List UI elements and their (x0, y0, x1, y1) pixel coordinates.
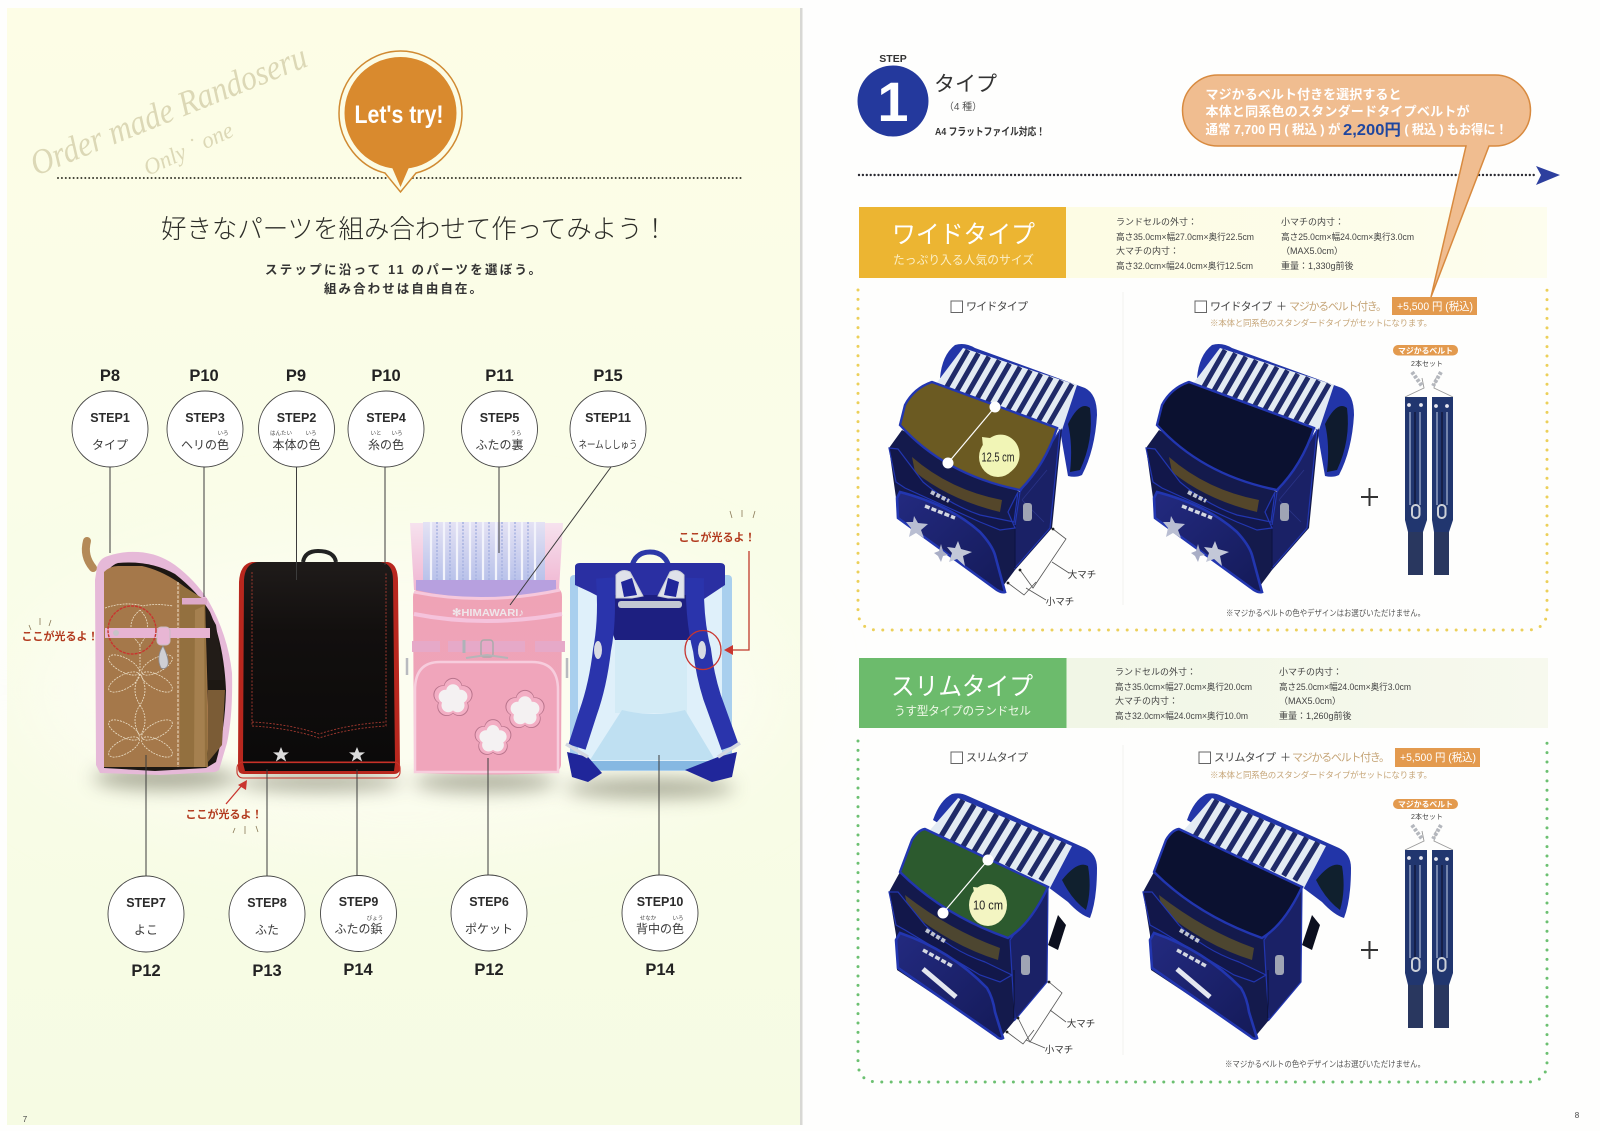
step circle: STEP4: いと (370, 430, 382, 437)
step circle: STEP1: P8 (100, 367, 120, 385)
band: slim type: 高さ25.0cm×幅24.0cm×奥行3.0cm (1279, 681, 1411, 692)
option label: wide with belt: ＋ (1276, 301, 1287, 313)
script lettering: Order made Randoseru (24, 37, 313, 183)
belts: slim (1393, 799, 1458, 1028)
step circle: STEP3: P10 (189, 367, 219, 385)
page number 7: 7 (23, 1115, 28, 1124)
step circle: STEP4: STEP4 (366, 411, 406, 425)
step circle: STEP10: STEP10 (637, 895, 683, 909)
panel: slim options dotted frame (858, 741, 1547, 1082)
Let's try speech bubble: Let's try! (354, 101, 444, 129)
step circle: STEP1: タイプ (92, 438, 128, 452)
Let's try speech bubble (339, 51, 462, 192)
band: slim type: （MAX5.0cm） (1279, 696, 1341, 706)
option label: slim with belt: スリムタイプ (1214, 751, 1276, 764)
band: slim type: 高さ32.0cm×幅24.0cm×奥行10.0m (1115, 710, 1248, 721)
band: slim type: 高さ35.0cm×幅27.0cm×奥行20.0cm (1115, 681, 1252, 692)
step circle: STEP7: よこ (134, 923, 158, 937)
bag: front view black with red edge (237, 551, 400, 778)
callout: belt discount: ( 税込 ) もお得に！ (1404, 122, 1508, 137)
step circle: STEP10: いろ (672, 915, 684, 922)
page number 8: 8 (1575, 1111, 1580, 1120)
bag: side view brown and pink (86, 541, 232, 775)
band: wide type: 高さ35.0cm×幅27.0cm×奥行22.5cm (1116, 231, 1254, 242)
option label: slim with belt: +5,500 円 (税込) (1400, 750, 1476, 764)
option label: slim: スリムタイプ (966, 751, 1028, 764)
callout: belt discount: マジかるベルト付きを選択すると (1206, 87, 1402, 102)
bag: back view blue (566, 552, 740, 782)
band: wide type: 大マチの内寸： (1116, 245, 1179, 256)
step circle: STEP7 (108, 876, 184, 980)
option label: slim with belt: ＋ (1280, 752, 1291, 764)
band: wide type: たっぷり入る人気のサイズ (893, 253, 1034, 267)
callout: belt discount: 本体と同系色のスタンダードタイプベルトが (1206, 104, 1470, 119)
option label: wide with belt (1195, 297, 1477, 328)
bag: wide with brown panel (889, 344, 1097, 592)
step circle: STEP9: STEP9 (339, 895, 378, 909)
bag: slim open (1143, 793, 1351, 1039)
panel: left page (7, 8, 800, 1125)
callout: belt discount: 2,200円 (1343, 122, 1401, 139)
step circle: STEP11 (570, 367, 646, 467)
step circle: STEP2: P9 (286, 367, 306, 385)
step circle: STEP6: STEP6 (469, 895, 509, 909)
bag: pink with flower pocket: ✻HIMAWARI♪ (452, 607, 524, 619)
step circle: STEP3: ヘリの色 (181, 438, 229, 452)
belts: slim: マジかるベルト (1398, 800, 1453, 809)
bag shadows (93, 766, 735, 798)
step circle: STEP8: STEP8 (247, 896, 287, 910)
note: wide: ※マジかるベルトの色やデザインはお選びいただけません。 (1226, 608, 1425, 618)
step circle: STEP9: ふたの鋲 (334, 921, 383, 936)
callout: glow left: ここが光るよ！ (22, 629, 98, 643)
band: slim type: うす型タイプのランドセル (894, 704, 1031, 718)
bag: wide with brown panel: 12.5 cm (982, 450, 1014, 464)
step circle: STEP7: STEP7 (126, 896, 166, 910)
step circle: STEP4 (348, 367, 424, 467)
step heading: タイプ (934, 73, 997, 96)
option label: wide: ワイドタイプ (966, 300, 1028, 313)
step circle: STEP9: びょう (367, 914, 383, 922)
step circle: STEP6 (451, 875, 527, 979)
depth labels: slim: 小マチ (1045, 1045, 1073, 1056)
band: wide type: 小マチの内寸： (1281, 216, 1344, 227)
band: slim type: 大マチの内寸： (1115, 695, 1178, 706)
step heading: A4 フラットファイル対応！ (935, 125, 1045, 138)
belts: wide (1393, 345, 1458, 575)
step circle: STEP11: STEP11 (585, 411, 631, 425)
step circle: STEP11: ネームししゅう (578, 439, 638, 451)
callout: glow right (678, 510, 756, 655)
step circle: STEP11: P15 (593, 367, 623, 385)
band: slim type: 小マチの内寸： (1279, 666, 1342, 677)
option label: wide with belt: ※本体と同系色のスタンダードタイプがセットになります。 (1210, 318, 1432, 328)
option label: wide with belt: マジかるベルト付き。 (1289, 300, 1387, 313)
step circle: STEP5: P11 (485, 367, 514, 385)
callout: belt discount (1182, 75, 1530, 297)
step circle: STEP4: いろ (391, 430, 403, 437)
belts: wide: 2本セット (1411, 359, 1443, 368)
band: wide type: （MAX5.0cm） (1281, 246, 1343, 256)
panel: wide options dotted frame (858, 290, 1547, 630)
script lettering: Only ˙ one (140, 117, 237, 181)
band: slim type (859, 658, 1548, 728)
step circle: STEP6: P12 (474, 961, 504, 979)
title: 好きなパーツを組み合わせて作ってみよう！ (161, 214, 668, 244)
option label: slim with belt: マジかるベルト付き。 (1292, 751, 1390, 764)
step circle: STEP10: せなか (640, 915, 657, 922)
step circle: STEP2: はんたい (270, 430, 292, 437)
step circle: STEP8: P13 (252, 962, 282, 980)
callout: glow right: ここが光るよ！ (678, 530, 756, 544)
depth labels: wide (1007, 528, 1096, 608)
option label: wide with belt: +5,500 円 (税込) (1397, 299, 1473, 313)
step circle: STEP4: P10 (371, 367, 401, 385)
step circle: STEP2: いろ (305, 430, 317, 437)
subtitle (265, 262, 541, 296)
leader lines (110, 467, 659, 876)
step circle: STEP10 (622, 875, 698, 979)
bag: pink with flower pocket (407, 522, 567, 774)
callout: belt discount: 通常 7,700 円 ( 税込 ) が (1206, 122, 1340, 137)
belts: wide: マジかるベルト (1398, 346, 1453, 356)
band: wide type: 高さ32.0cm×幅24.0cm×奥行12.5cm (1116, 260, 1253, 271)
step circle: STEP2: STEP2 (277, 411, 316, 425)
step circle: STEP5: STEP5 (480, 411, 519, 425)
step circle: STEP5: うら (510, 430, 522, 437)
step circle: STEP4: 糸の色 (368, 437, 404, 452)
step circle: STEP3: STEP3 (185, 411, 225, 425)
belts: slim: 2本セット (1411, 812, 1443, 821)
step circle: STEP5: ふたの裏 (475, 438, 524, 452)
depth labels: slim (1006, 981, 1095, 1056)
step circle: STEP3 (167, 367, 243, 467)
step circle: STEP10: P14 (645, 961, 676, 979)
depth labels: wide: 小マチ (1046, 597, 1074, 608)
step circle: STEP6: ポケット (465, 922, 513, 936)
band: slim type: ランドセルの外寸： (1115, 666, 1196, 677)
band: wide type: 高さ25.0cm×幅24.0cm×奥行3.0cm (1281, 231, 1414, 242)
option label: slim with belt (1199, 748, 1480, 780)
bag: slim with green panel: 10 cm (973, 898, 1003, 912)
step circle: STEP3: いろ (217, 430, 229, 437)
step badge: 1 (877, 70, 909, 133)
callout: glow left (22, 618, 98, 643)
step circle: STEP1 (72, 367, 148, 467)
step badge (858, 53, 928, 136)
subtitle: ステップに沿って 11 のパーツを選ぼう。 (265, 262, 541, 277)
step circle: STEP9: P14 (343, 961, 374, 979)
depth labels: slim: 大マチ (1067, 1018, 1095, 1030)
callout: glow bottom: ここが光るよ！ (186, 807, 262, 821)
step circle: STEP5 (462, 367, 538, 467)
note: slim: ※マジかるベルトの色やデザインはお選びいただけません。 (1225, 1059, 1425, 1069)
step circle: STEP9 (320, 876, 396, 979)
option label: wide with belt: ワイドタイプ (1210, 300, 1272, 313)
step heading: （4 種） (944, 100, 982, 113)
depth labels: wide: 大マチ (1068, 569, 1096, 581)
band: wide type: ランドセルの外寸： (1116, 216, 1197, 227)
option label: slim with belt: ※本体と同系色のスタンダードタイプがセットになります。 (1210, 770, 1432, 780)
band: wide type (859, 207, 1547, 278)
bag: slim with green panel (889, 793, 1097, 1039)
step circle: STEP2: 本体の色 (272, 438, 321, 452)
step heading (934, 73, 1045, 138)
step circle: STEP8 (229, 876, 305, 980)
dotted arrow (859, 166, 1560, 185)
step circle: STEP10: 背中の色 (636, 921, 684, 936)
band: slim type: 重量：1,260g前後 (1279, 710, 1352, 721)
step circle: STEP8: ふた (255, 923, 279, 937)
step circle: STEP1: STEP1 (90, 411, 130, 425)
plus sign (1361, 488, 1378, 506)
band: wide type: ワイドタイプ (892, 221, 1035, 249)
band: wide type: 重量：1,330g前後 (1281, 260, 1354, 271)
bag: wide open (1146, 344, 1354, 592)
callout: glow bottom (186, 780, 262, 834)
plus sign (1361, 941, 1378, 959)
step circle: STEP2 (258, 367, 334, 467)
band: slim type: スリムタイプ (891, 673, 1033, 701)
subtitle: 組み合わせは自由自在。 (324, 281, 482, 296)
step circle: STEP7: P12 (131, 962, 161, 980)
step badge: STEP (879, 53, 907, 65)
